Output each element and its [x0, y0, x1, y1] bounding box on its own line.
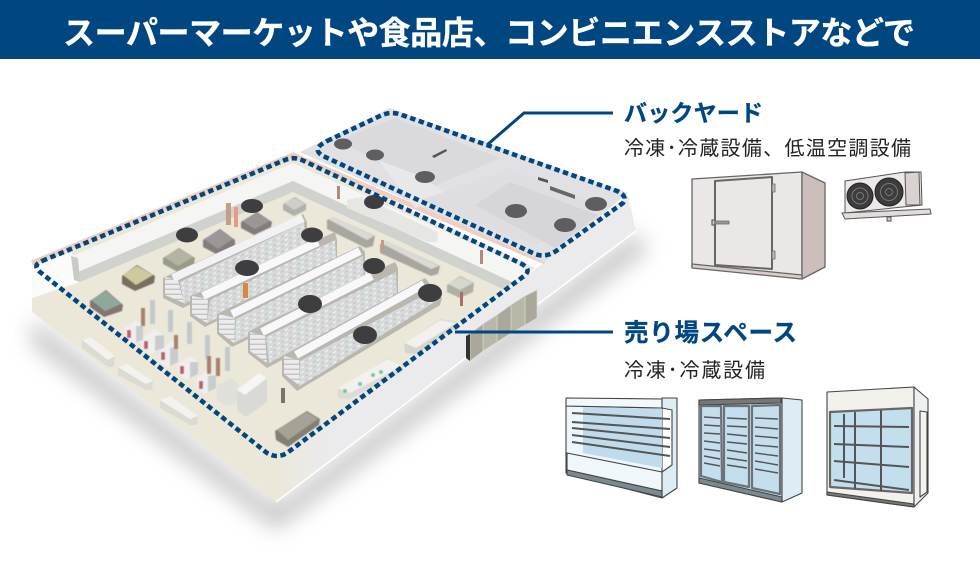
leader line: sales space — [455, 330, 613, 334]
label: sales space: 売り場スペース — [624, 319, 797, 347]
front-left service counters — [82, 337, 198, 425]
low case — [275, 411, 320, 447]
refrigeration units: backyard — [334, 138, 607, 232]
refrigeration units: sales area — [176, 195, 442, 344]
title band — [0, 0, 980, 59]
icon: unit cooler — [842, 172, 931, 221]
icon: walk-in cold room — [692, 172, 825, 279]
floor — [32, 155, 535, 502]
people — [226, 186, 483, 403]
icon: reach-in showcase — [827, 387, 928, 507]
shelf row 2 — [190, 232, 337, 327]
icon: open multi-deck showcase — [566, 398, 677, 498]
pallets and display islands — [90, 197, 474, 447]
backyard roof — [300, 108, 628, 262]
label: backyard: バックヤード — [624, 100, 763, 126]
right outer wall — [276, 195, 636, 502]
shelving aisles — [163, 214, 442, 391]
icon: glass door showcase — [699, 398, 802, 502]
label: backyard: 冷凍･冷蔵設備、低温空調設備 — [624, 137, 911, 160]
back wall pink edge — [32, 155, 545, 263]
chilled island case — [337, 358, 403, 399]
shelf row 3 — [217, 246, 365, 347]
white corner of floor — [32, 252, 80, 298]
white long case — [404, 319, 457, 354]
shelf row 4 — [248, 262, 398, 368]
dashed outline: backyard — [318, 113, 625, 255]
label: sales space — [624, 319, 797, 382]
back wall display cases — [71, 163, 530, 290]
dashed outline: sales floor — [36, 158, 528, 456]
checkout counters — [125, 300, 267, 417]
shelf row 5 — [282, 278, 442, 391]
shelf row 1 — [163, 214, 307, 308]
title band: スーパーマーケットや食品店、コンビニエンスストアなどで — [63, 15, 915, 51]
outdoor units — [466, 290, 537, 361]
store floor plan illustration — [32, 108, 648, 530]
building shadow — [32, 232, 648, 530]
leader line: backyard — [487, 113, 613, 145]
label: backyard — [624, 100, 911, 160]
label: sales space: 冷凍･冷蔵設備 — [624, 359, 765, 382]
